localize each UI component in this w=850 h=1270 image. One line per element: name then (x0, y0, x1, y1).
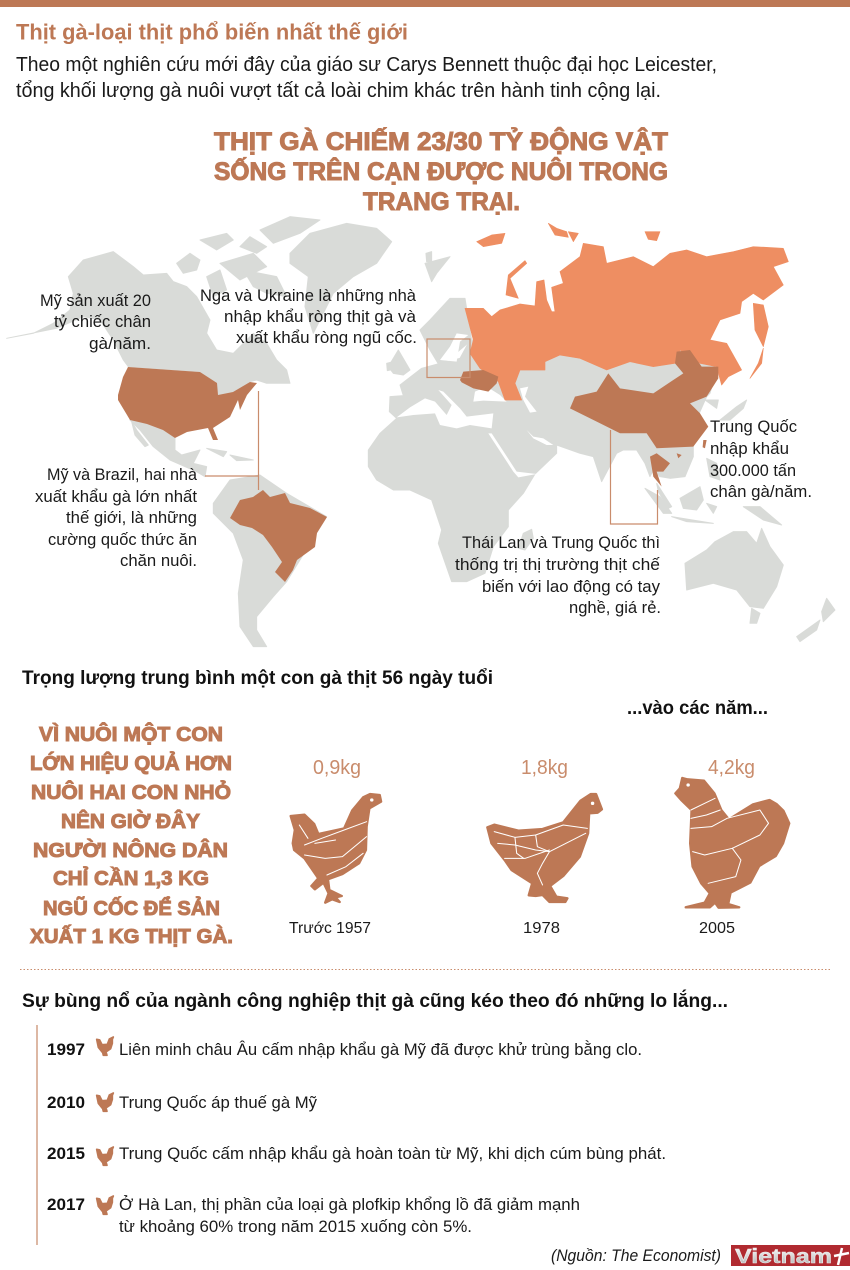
callout: Russia and Ukraine: nhập khẩu ròng thịt gà và (224, 307, 417, 326)
timeline 2010: 2010 (47, 1093, 85, 1112)
callout: China imports (710, 417, 812, 501)
main title: TRANG TRẠI. (363, 188, 520, 216)
left feed efficiency statement: CHỈ CẦN 1,3 KG (53, 867, 209, 890)
callout: China imports: chân gà/năm. (710, 482, 812, 501)
timeline 1997: Liên minh châu Âu cấm nhập khẩu gà Mỹ đã được khử trùng bằng clo. (119, 1040, 642, 1059)
callout: China imports: Trung Quốc (710, 417, 797, 436)
timeline 2015: 2015 (47, 1144, 85, 1163)
weight: 4,2kg in 2005: 2005 (699, 920, 735, 937)
weight: 0,9kg before 1957 (289, 757, 381, 937)
left feed efficiency statement: VÌ NUÔI MỘT CON (39, 722, 223, 746)
left feed efficiency statement: NGŨ CỐC ĐỂ SẢN (43, 896, 220, 920)
Russia (465, 223, 788, 400)
top bar (0, 0, 850, 7)
logo: Vietnam+: Vietnam (735, 1246, 832, 1268)
heading: Thịt gà-loại thịt phổ biến nhất thế giới (16, 20, 408, 44)
subheading: by year: ...vào các năm... (627, 698, 768, 719)
callout: Thailand and China: nghề, giá rẻ. (569, 598, 661, 617)
left feed efficiency statement: LỚN HIỆU QUẢ HƠN (30, 751, 232, 775)
callout: Russia and Ukraine: Nga và Ukraine là những nhà (200, 286, 417, 305)
callout: US drumsticks: gà/năm. (89, 334, 151, 353)
intro text (16, 54, 717, 102)
callout: US and Brazil: cường quốc thức ăn (48, 530, 197, 549)
weight: 1,8kg in 1978 (487, 757, 602, 937)
left feed efficiency statement: XUẤT 1 KG THỊT GÀ. (30, 925, 233, 948)
weight: 1,8kg in 1978: 1,8kg (521, 757, 568, 779)
left feed efficiency statement: NGƯỜI NÔNG DÂN (33, 838, 228, 862)
callout: Thailand and China: biến với lao động có tay (482, 577, 660, 596)
callout: US drumsticks: tỷ chiếc chân (54, 312, 151, 331)
callout: US drumsticks: Mỹ sản xuất 20 (40, 291, 151, 310)
callout: Russia and Ukraine: xuất khẩu ròng ngũ cốc. (236, 328, 417, 347)
left feed efficiency statement: NÊN GIỜ ĐÂY (61, 809, 201, 833)
main title (214, 126, 668, 216)
intro text: Theo một nghiên cứu mới đây của giáo sư Carys Bennett thuộc đại học Leicester, (16, 54, 717, 76)
left feed efficiency statement: NUÔI HAI CON NHỎ (31, 780, 231, 804)
timeline 2017: Ở Hà Lan, thị phần của loại gà plofkip khổng lồ đã giảm mạnh (119, 1195, 580, 1214)
timeline 1997: 1997 (47, 1040, 85, 1059)
intro text: tổng khối lượng gà nuôi vượt tất cả loài chim khác trên hành tinh cộng lại. (16, 80, 661, 102)
section heading: average weight: Trọng lượng trung bình một con gà thịt 56 ngày tuổi (22, 668, 493, 689)
weight: 1,8kg in 1978: 1978 (523, 920, 560, 937)
callout: US and Brazil (35, 465, 198, 570)
callout: Thailand and China: thống trị thị trường thịt chế (455, 555, 661, 574)
main title: SỐNG TRÊN CẠN ĐƯỢC NUÔI TRONG (214, 156, 668, 186)
logo: Vietnam+ (731, 1245, 850, 1268)
callout: US and Brazil: xuất khẩu gà lớn nhất (35, 487, 197, 506)
callout: Thailand and China: Thái Lan và Trung Quốc thì (462, 533, 660, 552)
left feed efficiency statement (30, 722, 233, 948)
callout: Thailand and China (455, 533, 661, 617)
callout lines (205, 339, 658, 524)
main title: THỊT GÀ CHIẾM 23/30 TỶ ĐỘNG VẬT (214, 126, 668, 156)
weight: 4,2kg in 2005: 4,2kg (708, 757, 755, 779)
timeline 2017: từ khoảng 60% trong năm 2015 xuống còn 5%. (119, 1217, 472, 1236)
source: (Nguồn: The Economist) (551, 1246, 721, 1265)
callout: China imports: 300.000 tấn (710, 461, 796, 480)
weight: 4,2kg in 2005 (675, 757, 789, 937)
timeline 2017: 2017 (47, 1195, 85, 1214)
callout: China imports: nhập khẩu (710, 439, 789, 458)
weight: 0,9kg before 1957: 0,9kg (313, 757, 361, 779)
timeline 2017 (47, 1195, 580, 1236)
dotted separator (20, 968, 832, 970)
callout: US and Brazil: chăn nuôi. (120, 551, 197, 570)
callout: US drumsticks (40, 291, 151, 353)
callout: Russia and Ukraine (200, 286, 417, 347)
timeline 2010: Trung Quốc áp thuế gà Mỹ (119, 1093, 317, 1112)
world map (7, 217, 835, 647)
section heading: worries: Sự bùng nổ của ngành công nghiệp thịt gà cũng kéo theo đó những lo lắng... (22, 990, 728, 1012)
China, USA, Brazil, Ukraine, Thailand highlighted (118, 350, 718, 582)
callout: US and Brazil: thế giới, là những (66, 508, 197, 527)
timeline bar (36, 1025, 38, 1245)
callout: US and Brazil: Mỹ và Brazil, hai nhà (47, 465, 198, 484)
timeline 2015: Trung Quốc cấm nhập khẩu gà hoàn toàn từ Mỹ, khi dịch cúm bùng phát. (119, 1144, 666, 1163)
weight: 0,9kg before 1957: Trước 1957 (289, 920, 371, 937)
